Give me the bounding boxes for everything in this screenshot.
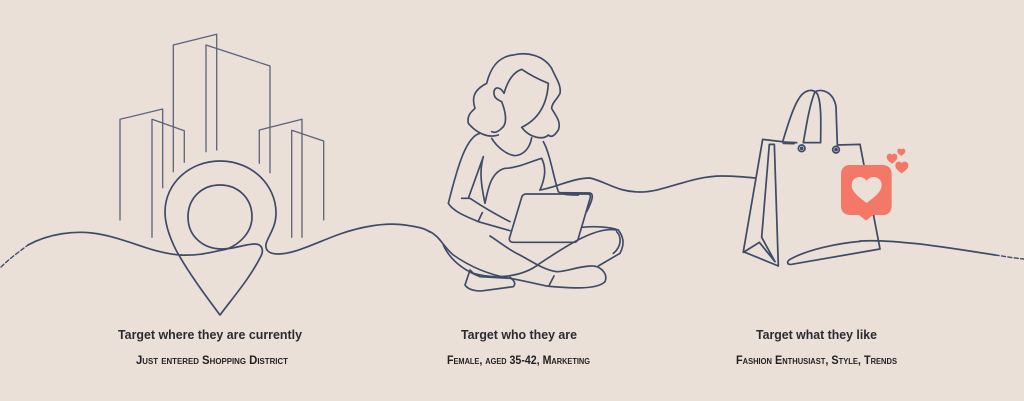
connecting line from laptop to bag — [540, 176, 755, 192]
location pin and connecting line — [28, 161, 430, 315]
white heart — [852, 177, 882, 203]
heading: target who: Target who they are — [461, 327, 577, 342]
woman with laptop, drawn as one line — [430, 54, 623, 291]
heading: target where: Target where they are currently — [118, 327, 303, 342]
subtext: who: Female, aged 35-42, Marketing — [447, 355, 590, 367]
icon: city buildings — [120, 34, 324, 237]
heading: target what: Target what they like — [756, 327, 877, 342]
small hearts — [887, 149, 908, 173]
subtext: what: Fashion Enthusiast, Style, Trends — [736, 355, 898, 367]
icon: heart notification badge — [841, 149, 908, 221]
neck — [492, 138, 532, 156]
dashed line start on the left — [1, 245, 28, 267]
hair and face — [468, 54, 560, 138]
crossed legs — [465, 227, 623, 291]
subtext: where: Just entered Shopping District — [136, 355, 288, 367]
laptop — [509, 193, 592, 242]
icon: shopping bag — [743, 90, 880, 266]
closing line to the right edge — [860, 241, 995, 255]
torso and arms — [448, 133, 578, 231]
